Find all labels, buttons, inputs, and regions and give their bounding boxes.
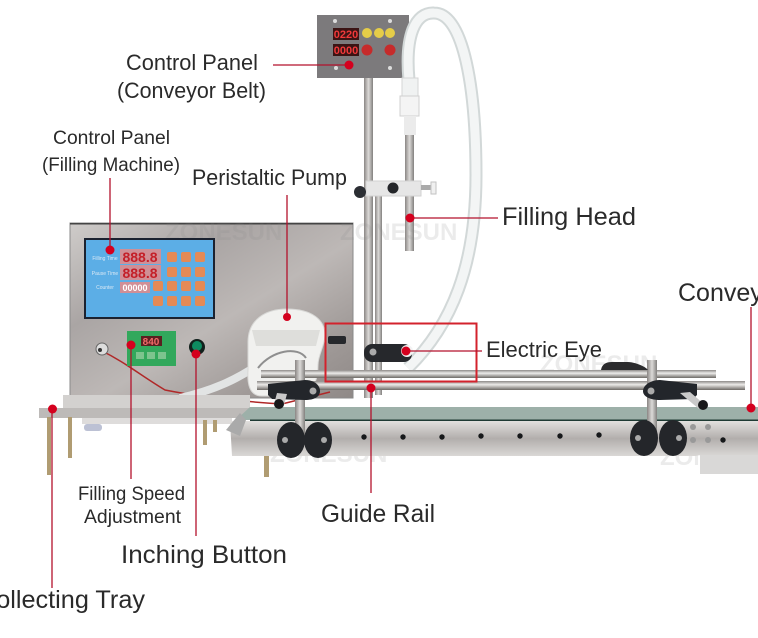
speed controller xyxy=(127,331,176,366)
conveyor control panel: 0000 xyxy=(334,45,358,57)
power socket xyxy=(96,343,108,355)
callout: control panel conveyor belt: Control Panel xyxy=(126,50,258,75)
filling machine touch panel: Counter xyxy=(96,285,114,291)
filling machine touch panel: Filling Time xyxy=(92,256,118,262)
callout: control panel conveyor belt xyxy=(117,50,354,103)
callout: filling speed adjustment: Filling Speed xyxy=(78,484,185,505)
faint watermark: ZONESUN xyxy=(540,351,657,378)
filling machine touch panel: 888.8 xyxy=(122,249,158,265)
callout: peristaltic pump xyxy=(192,165,347,321)
faint watermark: ZONESUN xyxy=(270,441,387,468)
black knob on cabinet xyxy=(328,336,346,344)
filling machine cabinet xyxy=(70,223,353,404)
conveyor control panel xyxy=(317,15,409,78)
faint watermark xyxy=(165,219,758,471)
filling head xyxy=(354,78,436,251)
filling machine touch panel: Pause Time xyxy=(92,271,118,277)
callout: inching button: Inching Button xyxy=(121,541,287,569)
tubing from pump to cabinet xyxy=(180,362,262,398)
faint watermark: ZONESUN xyxy=(165,219,282,246)
vertical support pole xyxy=(364,78,382,398)
collecting tray xyxy=(39,395,250,475)
callout: filling head: Filling Head xyxy=(502,203,636,231)
electric eye sensor xyxy=(364,344,413,362)
callout: collecting tray xyxy=(0,404,145,614)
power cable xyxy=(100,350,330,404)
callout: electric eye xyxy=(402,337,602,362)
inching button xyxy=(189,339,205,355)
filling machine touch panel: 00000 xyxy=(122,283,148,293)
callout: electric eye: Electric Eye xyxy=(486,337,602,362)
callout: control panel filling machine xyxy=(42,128,180,254)
callout: filling speed adjustment xyxy=(78,340,185,528)
callout: conveyor belt xyxy=(678,279,758,412)
callout: filling speed adjustment: Adjustment xyxy=(84,507,182,528)
callout: control panel conveyor belt: (Conveyor Belt) xyxy=(117,78,266,103)
conveyor belt xyxy=(226,407,758,477)
peristaltic pump xyxy=(248,309,325,396)
callout: guide rail: Guide Rail xyxy=(321,500,435,528)
callout: inching button xyxy=(121,350,287,569)
electric eye highlight box xyxy=(326,324,476,382)
callout: peristaltic pump: Peristaltic Pump xyxy=(192,165,347,190)
callout: control panel filling machine: Control Panel xyxy=(53,128,170,149)
silicone hose xyxy=(408,13,476,368)
speed controller: 840 xyxy=(143,337,160,348)
callout: guide rail xyxy=(321,384,435,528)
filling machine touch panel: 888.8 xyxy=(122,265,158,281)
filling machine touch panel xyxy=(85,239,214,318)
callout: filling head xyxy=(406,203,636,231)
guide rails and clamps xyxy=(257,360,745,458)
callout: control panel filling machine: (Filling Machine) xyxy=(42,155,180,176)
conveyor control panel: 0220 xyxy=(334,29,358,41)
faint watermark: ZONESUN xyxy=(340,219,457,246)
